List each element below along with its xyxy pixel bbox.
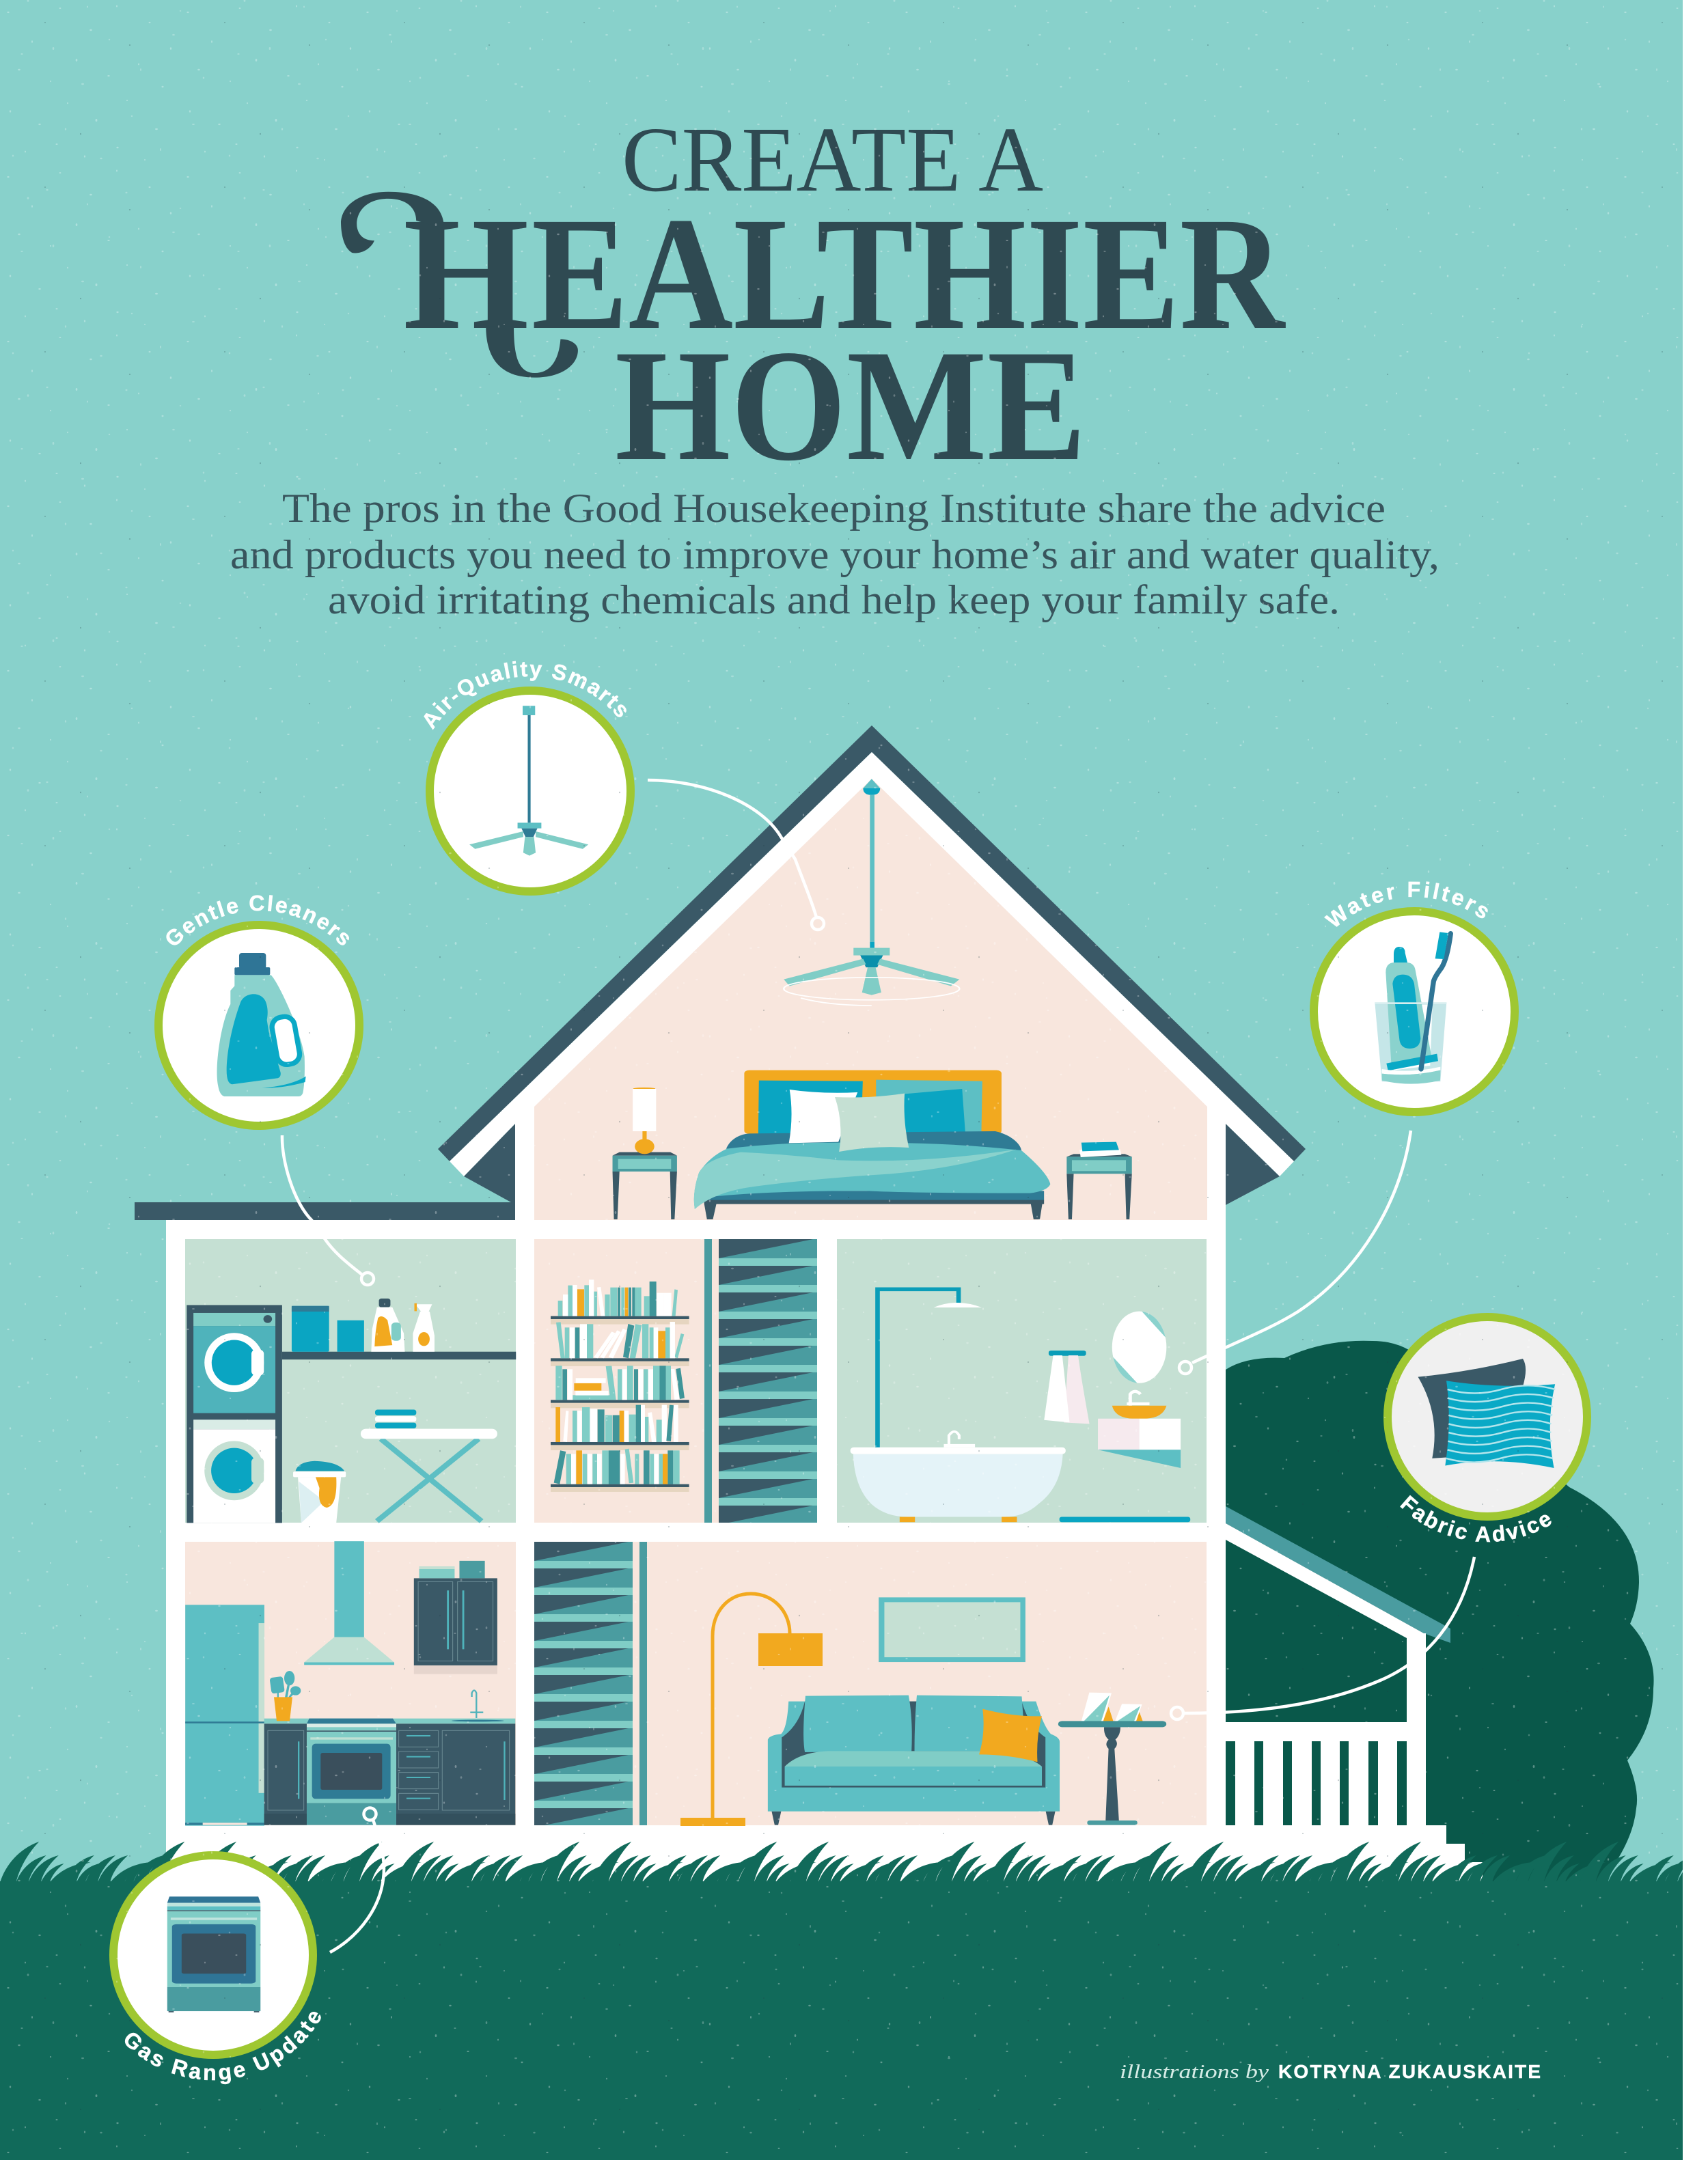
- kitchen wall: [185, 1542, 516, 1825]
- bathtub: [851, 1432, 1066, 1522]
- grass blades: [0, 1842, 1683, 1881]
- lower kitchen: [185, 1671, 515, 1825]
- laundry room wall: [185, 1239, 516, 1523]
- storage containers: [292, 1306, 364, 1352]
- connector: gas range: [330, 1808, 384, 1952]
- porch: [166, 1506, 1483, 1883]
- bed pillows: [758, 1080, 982, 1142]
- laundry shelf: [282, 1352, 516, 1359]
- callout: fabric advice: [1383, 1313, 1591, 1542]
- range hood and upper cabinets: [304, 1541, 497, 1674]
- left nightstand: [613, 1152, 677, 1219]
- ironing board: [361, 1429, 497, 1521]
- label: water filters: Water Filters: [1324, 881, 1488, 927]
- bath mat: [1060, 1517, 1190, 1522]
- title swash on the H: [341, 192, 578, 378]
- callout: gentle cleaners: [154, 895, 363, 1130]
- shelf boards: [551, 1316, 689, 1492]
- ceiling fan: [784, 779, 959, 1006]
- illustrator credit: [1120, 2061, 1541, 2083]
- white roof trim: [450, 752, 1294, 1220]
- duvet: [694, 1143, 1050, 1209]
- icon: ceiling fan: [469, 706, 588, 856]
- laundry room: [187, 1299, 516, 1523]
- title: [341, 109, 1286, 494]
- library wall: [534, 1239, 816, 1523]
- icon: toothpaste and toothbrush in glass: [1375, 932, 1450, 1084]
- upper staircase: [719, 1239, 817, 1523]
- porch roof edge: [1226, 1506, 1450, 1643]
- roof: [135, 725, 1306, 1220]
- icon: detergent bottle: [217, 953, 306, 1096]
- flat lower roof: [135, 1202, 516, 1220]
- callout: air-quality smarts: [424, 661, 635, 896]
- intro paragraph: [230, 486, 1440, 622]
- headboard: [744, 1070, 1002, 1134]
- porch railing: [1226, 1722, 1426, 1825]
- sink and vanity: [1098, 1391, 1181, 1468]
- utensil cup: [269, 1671, 301, 1721]
- right nightstand with books: [1066, 1142, 1132, 1219]
- front pillows: [789, 1090, 909, 1152]
- callout connector lines: [282, 780, 1474, 1952]
- bathroom: [851, 1289, 1190, 1522]
- lamp: [633, 1088, 656, 1154]
- books row 5: [554, 1449, 680, 1484]
- left eave shadow: [464, 1124, 516, 1202]
- title line: healthier: H: [403, 184, 529, 363]
- floor lamp: [680, 1594, 823, 1826]
- bed frame: [726, 1131, 1021, 1151]
- books row 1: [558, 1279, 678, 1316]
- laundry basket: [293, 1461, 346, 1523]
- counter top: [264, 1719, 515, 1723]
- bedroom furniture: [613, 1070, 1132, 1219]
- side table: [1058, 1693, 1166, 1825]
- intro line 2: and products you need to improve your home’s air and water quality,: [230, 532, 1440, 577]
- connector: gentle cleaners: [282, 1135, 374, 1285]
- books row 4: [555, 1405, 678, 1442]
- white gap beside upper stairs: [712, 1239, 719, 1523]
- callout: gas range update: [109, 1851, 321, 2085]
- living room wall: [534, 1542, 1207, 1825]
- wall picture: [879, 1597, 1025, 1662]
- label: gentle cleaners: Gentle Cleaners: [166, 895, 349, 945]
- washer and dryer stack: [187, 1305, 282, 1523]
- towels: [1044, 1351, 1090, 1424]
- sofa: [768, 1695, 1060, 1825]
- credit: illustrator name: KOTRYNA ZUKAUSKAITE: [1278, 2061, 1541, 2082]
- fridge: [185, 1605, 264, 1826]
- label: air-quality smarts: Air-Quality Smarts: [424, 661, 626, 730]
- stove: [307, 1719, 396, 1825]
- lower stair rail: [639, 1542, 647, 1825]
- upper stair rail: [704, 1239, 712, 1523]
- kitchen: [185, 1541, 515, 1826]
- kitchen faucet: [452, 1690, 504, 1721]
- icon: pillows: [1418, 1359, 1555, 1468]
- house base and steps: [166, 1825, 1483, 1883]
- connector: fabric advice: [1171, 1557, 1474, 1719]
- title line: healthier: EALTHIER: [532, 184, 1286, 363]
- label: fabric advice: Fabric Advice: [1400, 1495, 1552, 1542]
- small detergent bottle: [371, 1299, 404, 1352]
- intro line 1: The pros in the Good Housekeeping Institute share the advice: [282, 486, 1386, 531]
- bookshelf: [551, 1279, 689, 1492]
- white house frame: [166, 1220, 1226, 1825]
- right eave shadow: [1226, 1124, 1280, 1205]
- mirror: [1112, 1312, 1167, 1383]
- spray bottle: [413, 1303, 435, 1352]
- shower: [877, 1289, 982, 1448]
- books row 2: [556, 1322, 684, 1358]
- title line: home: HOME: [615, 316, 1086, 494]
- connector: air quality: [648, 780, 824, 930]
- lower cabinets: [264, 1723, 515, 1825]
- porch beam and post: [1226, 1523, 1426, 1825]
- dark roof band: [438, 725, 1306, 1161]
- attic bedroom wall: [534, 779, 1207, 1220]
- ground: [0, 1842, 1708, 2160]
- credit: illustrations by: illustrations by: [1120, 2061, 1269, 2083]
- bush behind the house: [1226, 1341, 1654, 1885]
- label: gas range update: Gas Range Update: [124, 2012, 321, 2085]
- icon: gas range: [167, 1896, 260, 2012]
- living room: [680, 1594, 1166, 1826]
- bathroom wall: [837, 1239, 1207, 1523]
- intro line 3: avoid irritating chemicals and help keep your family safe.: [328, 577, 1340, 622]
- house walls and rooms: [166, 779, 1226, 1825]
- books row 3: [555, 1366, 685, 1400]
- callout: water filters: [1310, 881, 1519, 1116]
- folded towels: [375, 1410, 416, 1428]
- lawn: [0, 1881, 1683, 2160]
- title line: create a: CREATE A: [622, 109, 1043, 211]
- lower staircase: [534, 1542, 633, 1825]
- connector: water filters: [1179, 1131, 1411, 1374]
